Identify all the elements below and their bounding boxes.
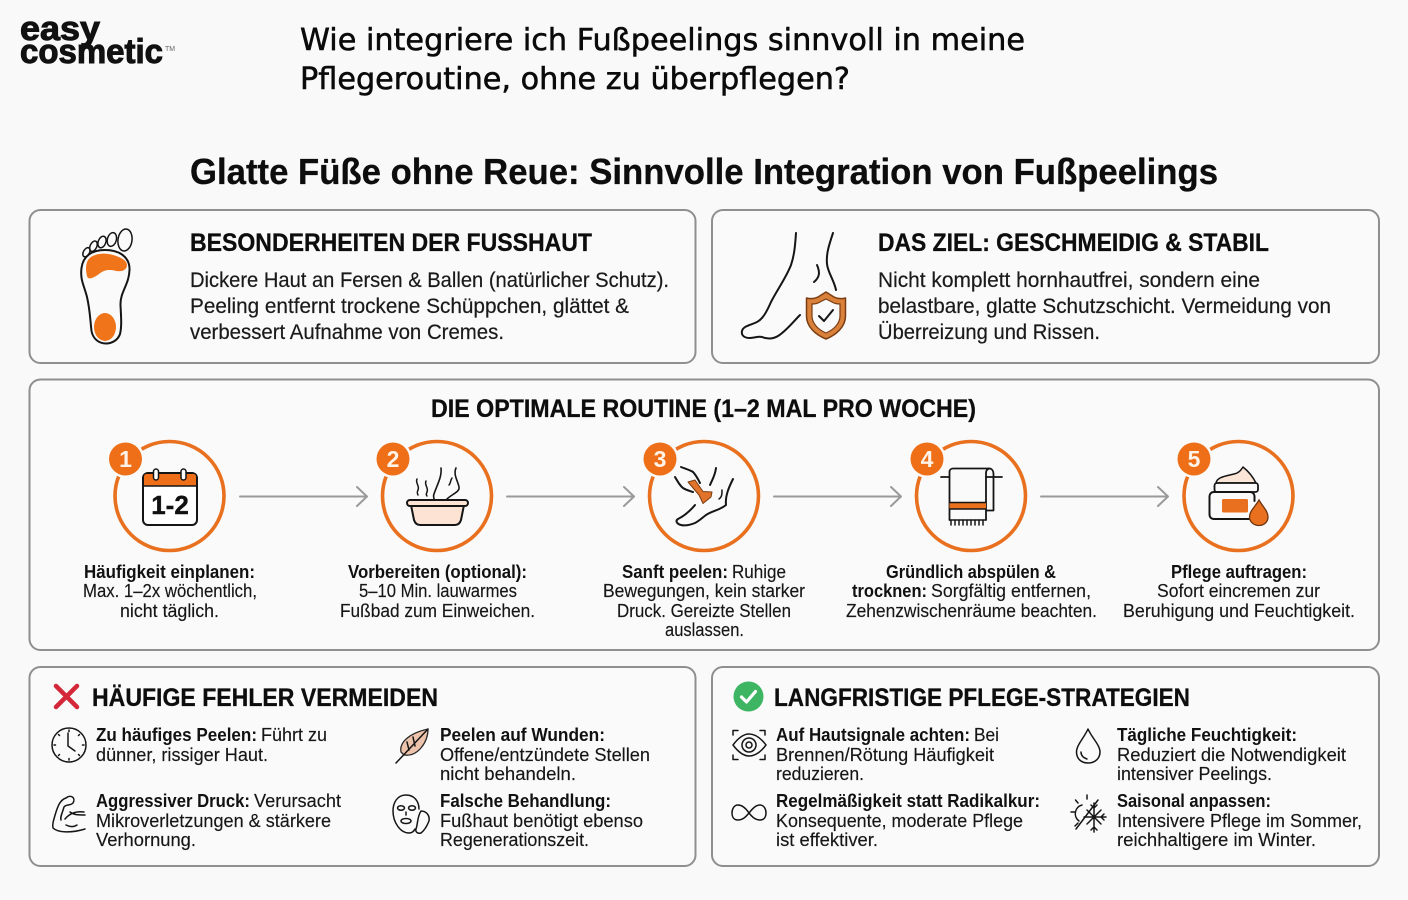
heading: DAS ZIEL: GESCHMEIDIG & STABIL [878,229,1269,257]
step 3 [603,440,805,640]
step text: Zehenzwischenräume beachten. [846,600,1097,621]
icon: foot sole [81,228,133,344]
item: Auf Hautsignale achten: Brennen/Rötung Häufigkeit [776,744,994,765]
step text [83,561,257,621]
step text: Max. 1–2x wöchentlich, [83,580,257,601]
icon: red cross [56,686,77,707]
item: Peelen auf Wunden: Peelen auf Wunden: [440,724,605,745]
item: Regelmäßigkeit statt Radikalkur: Regelmäßigkeit statt Radikalkur: [776,790,1040,811]
icon: foot with shield [742,233,846,339]
item: Falsche Behandlung: Regenerationszeit. [440,829,589,850]
item: Regelmäßigkeit statt Radikalkur: ist effektiver. [776,829,878,850]
icon: water drop [1076,729,1100,763]
icon: calendar [143,469,197,525]
body text: verbessert Aufnahme von Cremes. [190,320,504,344]
step text: Bewegungen, kein starker [603,580,805,601]
icon: infinity [732,805,766,820]
panel: Langfristige Pflege-Strategien [712,667,1379,866]
step text: Druck. Gereizte Stellen [617,600,791,621]
step 2 [340,440,535,621]
step text: Sorgfältig entfernen, [931,580,1091,601]
body text: Peeling entfernt trockene Schüppchen, glättet & [190,294,629,318]
item: Saisonal anpassen [1117,790,1362,850]
item: Aggressiver Druck: Aggressiver Druck: [96,790,250,811]
item: Falsche Behandlung [440,790,643,850]
panel: Die optimale Routine [30,380,1379,650]
logo: easy cosmetic: easy [20,10,100,48]
item: Auf Hautsignale achten: Bei [974,724,999,745]
icon: muscle arm [53,796,85,832]
step text: Vorbereiten (optional): [348,561,527,582]
step text: 5–10 Min. lauwarmes [359,580,517,601]
icon: calendar: 1-2 [151,490,189,520]
step text: Fußbad zum Einweichen. [340,600,535,621]
item: Saisonal anpassen: Saisonal anpassen: [1117,790,1271,811]
icon: eye with focus frame [733,730,766,760]
icon: towel on rail [941,468,1002,525]
step 5 [1123,440,1355,621]
item: Peelen auf Wunden: Offene/entzündete Stellen [440,744,650,765]
step 1: 1 [119,446,132,472]
icon: cream jar with drop [1210,467,1268,526]
arrow 4 [1041,487,1168,506]
step text [1123,561,1355,621]
step text: auslassen. [665,619,744,640]
body text [190,268,669,344]
arrow 1 [240,487,367,506]
body text [878,268,1331,344]
logo: easy cosmetic: TM [165,46,175,53]
step 5: 5 [1188,446,1201,472]
step 2: 2 [387,446,399,472]
icon: face mask and foot [393,795,429,833]
body text: Nicht komplett hornhautfrei, sondern eine [878,268,1260,292]
item: Zu häufiges Peelen: Zu häufiges Peelen: [96,724,257,745]
step text: Beruhigung und Feuchtigkeit. [1123,600,1355,621]
item: Saisonal anpassen: reichhaltigere im Winter. [1117,829,1316,850]
body text: Dickere Haut an Fersen & Ballen (natürlicher Schutz). [190,268,669,292]
item: Regelmäßigkeit statt Radikalkur: Konsequente, moderate Pflege [776,810,1023,831]
icon: green check [734,682,764,712]
item: Aggressiver Druck [96,790,341,850]
step 4: 4 [921,446,934,472]
step text: Häufigkeit einplanen: [84,561,255,582]
question heading: Wie integriere ich Fußpeelings sinnvoll in meine [300,23,1025,58]
item: Aggressiver Druck: Verursacht [254,790,341,811]
item: Tägliche Feuchtigkeit: Reduziert die Notwendigkeit [1117,744,1346,765]
icon: foot with scraper [675,467,733,525]
logo: easy cosmetic [20,10,175,71]
step text: trocknen: [852,580,927,601]
panel: Häufige Fehler vermeiden [30,667,696,866]
body text: belastbare, glatte Schutzschicht. Vermeidung von [878,294,1331,318]
item: Regelmäßigkeit statt Radikalkur [776,790,1040,850]
item: Auf Hautsignale achten: reduzieren. [776,763,864,784]
question heading: Pflegeroutine, ohne zu überpflegen? [300,62,850,97]
panel: Das Ziel [712,210,1379,363]
item: Zu häufiges Peelen: Führt zu [261,724,327,745]
icon: clock [52,728,86,762]
heading: BESONDERHEITEN DER FUSSHAUT [190,229,592,257]
item: Peelen auf Wunden [440,724,650,784]
routine heading: DIE OPTIMALE ROUTINE (1–2 MAL PRO WOCHE) [431,395,976,423]
item: Zu häufiges Peelen [96,724,327,765]
item: Saisonal anpassen: Intensivere Pflege im Sommer, [1117,810,1362,831]
icon: foot bath bowl [407,468,468,525]
item: Auf Hautsignale achten: Auf Hautsignale achten: [776,724,970,745]
step text [340,561,535,621]
item: Aggressiver Druck: Mikroverletzungen & stärkere [96,810,331,831]
item: Falsche Behandlung: Falsche Behandlung: [440,790,611,811]
step text: Pflege auftragen: [1171,561,1307,582]
step text: Gründlich abspülen & [886,561,1056,582]
icon: wound leaf [396,729,428,763]
icon: sun and snowflake [1071,795,1106,832]
step text: Sanft peelen: [622,561,728,582]
heading: HÄUFIGE FEHLER VERMEIDEN [92,684,438,712]
item: Auf Hautsignale achten [776,724,999,784]
arrow 3 [774,487,901,506]
step text [846,561,1097,621]
question heading [300,23,1025,97]
step text: Ruhige [732,561,786,582]
step text: nicht täglich. [120,600,219,621]
item: Tägliche Feuchtigkeit: intensiver Peelings. [1117,763,1272,784]
logo: easy cosmetic: cosmetic [20,33,163,71]
title: Glatte Füße ohne Reue: Sinnvolle Integration von Fußpeelings [190,151,1218,192]
item: Falsche Behandlung: Fußhaut benötigt ebenso [440,810,643,831]
item: Tägliche Feuchtigkeit: Tägliche Feuchtigkeit: [1117,724,1297,745]
heading: LANGFRISTIGE PFLEGE-STRATEGIEN [774,684,1190,712]
step 3: 3 [654,446,666,472]
step text: Sofort eincremen zur [1157,580,1320,601]
item: Tägliche Feuchtigkeit [1117,724,1346,784]
body text: Überreizung und Rissen. [878,320,1100,344]
panel: Besonderheiten der Fußhaut [30,210,696,363]
item: Peelen auf Wunden: nicht behandeln. [440,763,576,784]
step 4 [846,440,1097,621]
step text [603,561,805,640]
item: Zu häufiges Peelen: dünner, rissiger Haut. [96,744,268,765]
arrow 2 [507,487,634,506]
step 1 [83,440,257,621]
item: Aggressiver Druck: Verhornung. [96,829,196,850]
